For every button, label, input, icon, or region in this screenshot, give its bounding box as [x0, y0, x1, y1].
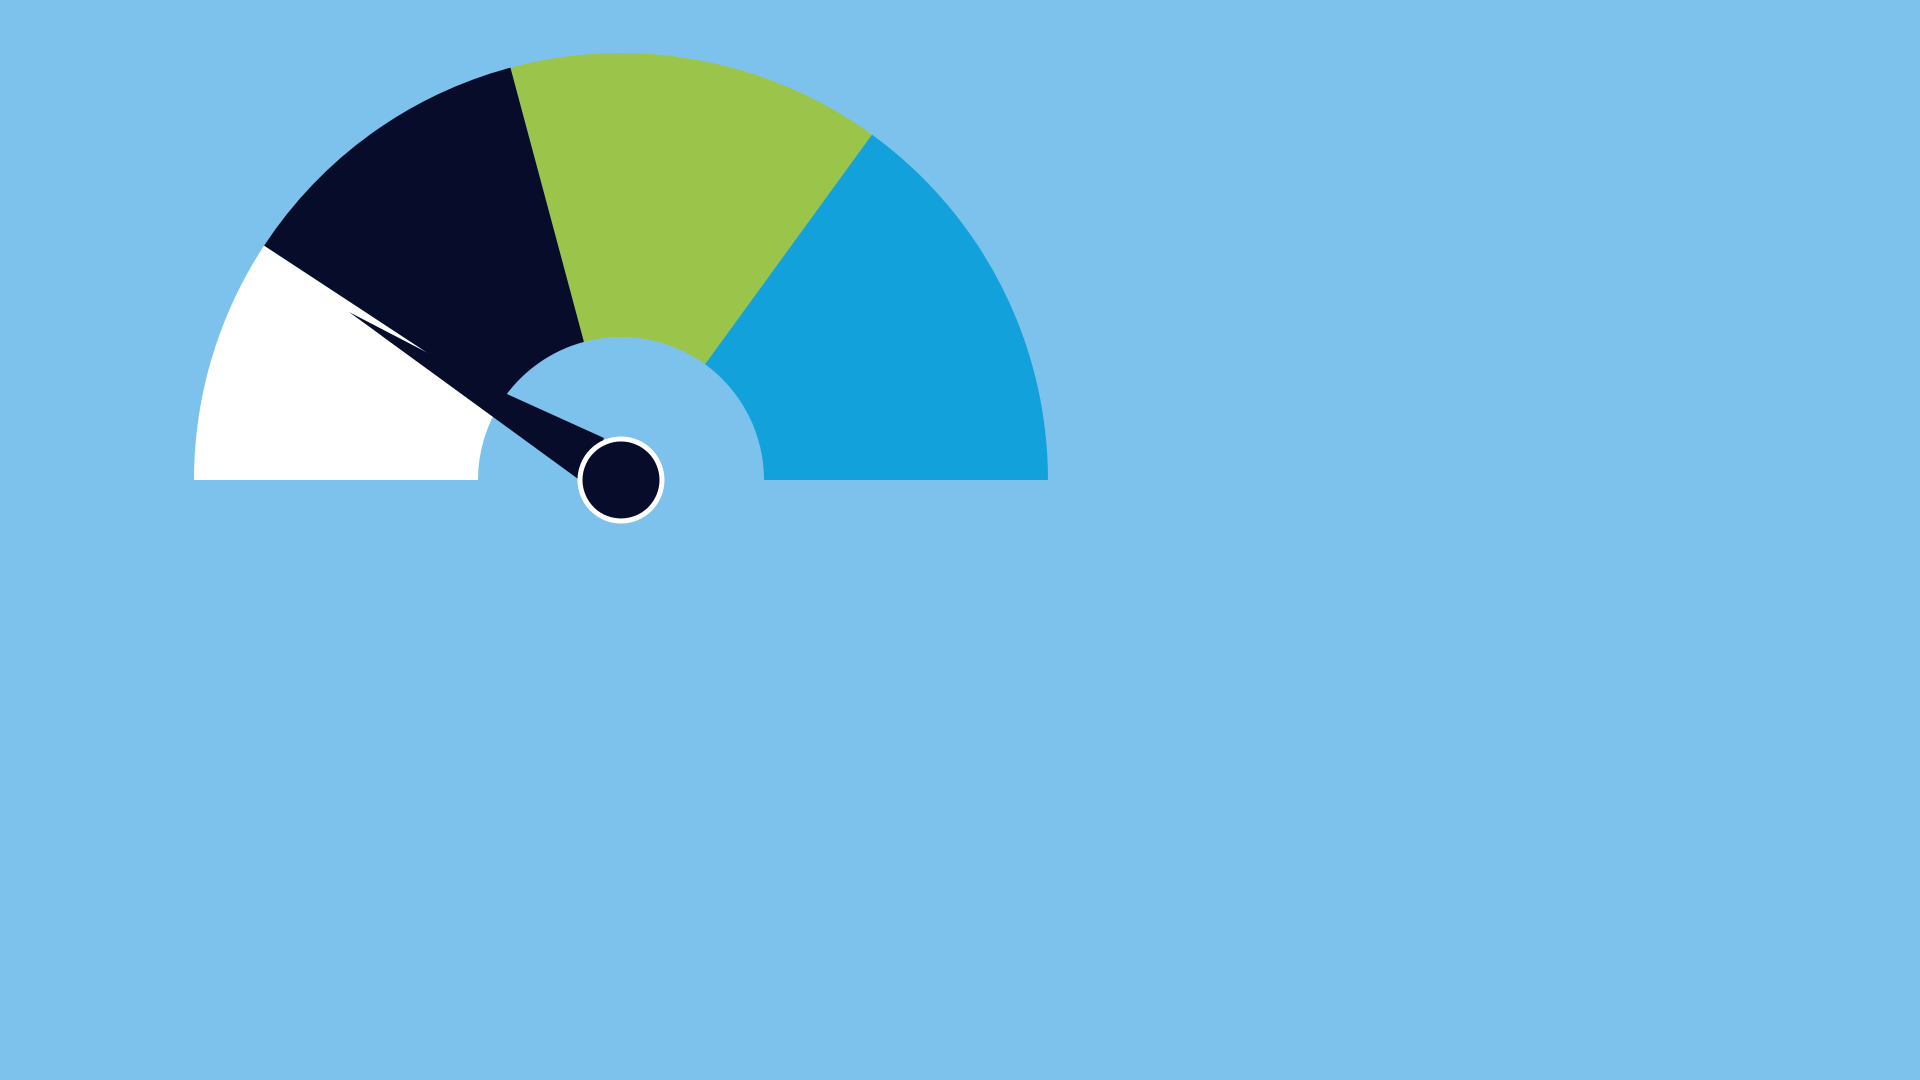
needle — [349, 312, 662, 521]
gauge dial — [194, 53, 1048, 480]
segment: green — [510, 53, 872, 364]
needle hub — [580, 439, 662, 521]
segment: blue — [705, 135, 1048, 480]
segment: white — [194, 246, 502, 480]
segment: navy — [264, 68, 584, 401]
